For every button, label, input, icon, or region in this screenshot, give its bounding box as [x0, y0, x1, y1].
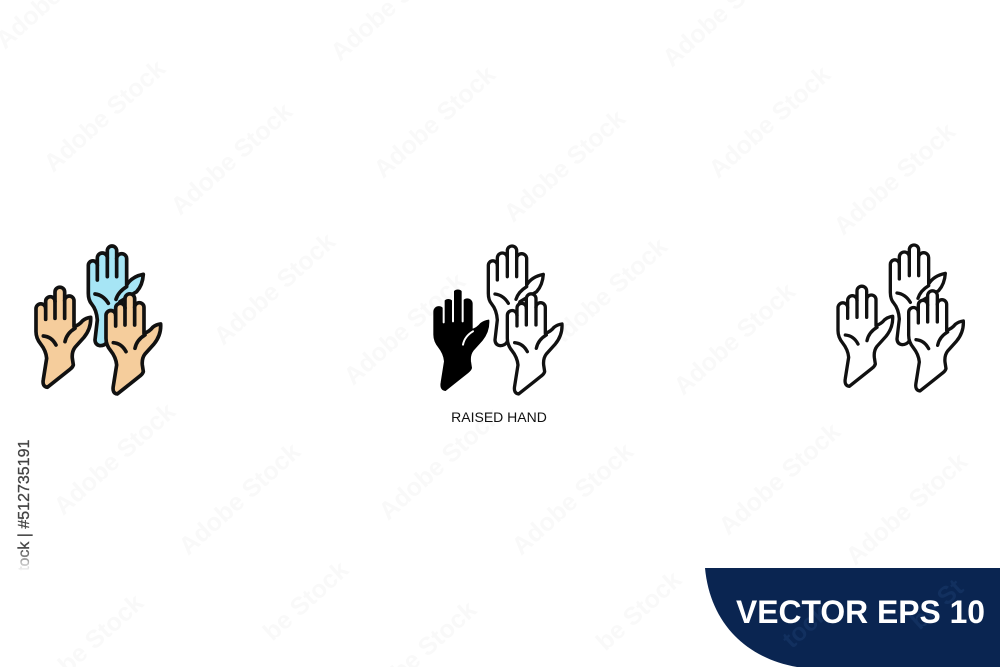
watermark pattern: Adobe Stock	[369, 60, 501, 184]
watermark pattern: Adobe Stock	[714, 417, 846, 541]
badge watermark: be St	[905, 573, 970, 635]
badge watermark	[777, 573, 970, 654]
watermark pattern: Adobe Stock	[339, 267, 471, 391]
outline left hand	[838, 286, 893, 386]
watermark pattern: Adobe Stock	[841, 447, 973, 571]
watermark pattern: Adobe Stock	[166, 97, 298, 221]
right orange hand	[106, 294, 161, 394]
watermark pattern: Adobe Stock	[507, 437, 639, 561]
icon label: RAISED HAND	[451, 409, 547, 425]
icon: coloured raised hands	[36, 246, 161, 394]
outline front hand	[909, 291, 963, 391]
icon: outline raised hands	[838, 245, 963, 391]
badge watermark: tock	[777, 599, 834, 654]
outline back hand	[488, 246, 543, 346]
watermark pattern: Adobe Stock	[669, 277, 801, 401]
watermark pattern: Adobe Stock	[49, 397, 181, 521]
outline back hand	[890, 245, 945, 345]
blue back hand	[88, 246, 143, 346]
left orange hand	[36, 287, 91, 387]
watermark pattern: be Stock	[258, 556, 354, 646]
badge shape	[705, 568, 1000, 667]
watermark pattern: Adobe Stock	[209, 227, 341, 351]
badge text: VECTOR EPS 10	[736, 594, 985, 630]
watermark pattern: Adobe Stock	[39, 54, 171, 178]
outline front hand	[507, 294, 562, 394]
watermark pattern: Adobe Stock	[499, 104, 631, 228]
watermark pattern: Adobe Stock	[541, 232, 673, 356]
side stock id text: tock | #512735191	[16, 440, 33, 571]
watermark pattern: Adobe Stock	[829, 117, 961, 241]
watermark pattern: Adobe Stock	[374, 402, 506, 526]
solid black hand	[434, 289, 489, 390]
watermark pattern: Adobe Stock	[704, 60, 836, 184]
badge: vector eps 10	[705, 568, 1000, 667]
watermark pattern: Adobe Stock	[174, 437, 306, 561]
watermark pattern: be Stock	[591, 566, 687, 656]
icon: glyph raised hands	[434, 246, 562, 394]
